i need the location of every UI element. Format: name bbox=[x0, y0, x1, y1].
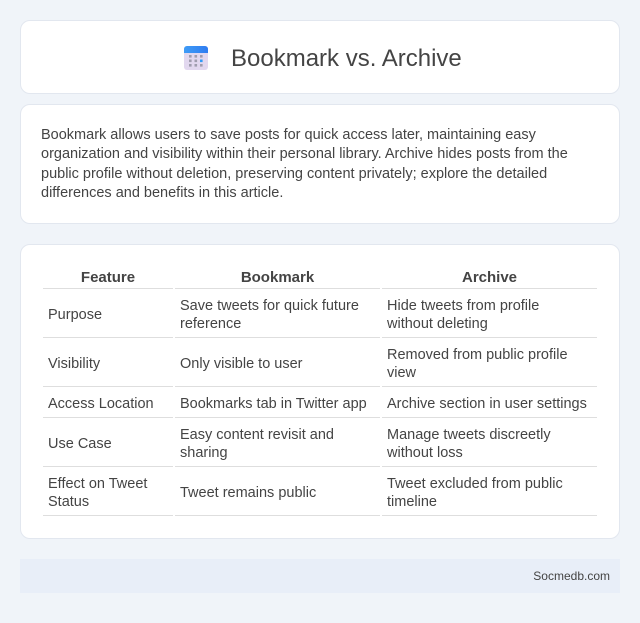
row: Purpose: without deleting bbox=[387, 316, 488, 332]
row: Access Location: Access Location bbox=[48, 396, 154, 412]
row: Access Location: Bookmarks tab in Twitter app bbox=[180, 396, 367, 412]
row: Use Case: sharing bbox=[180, 445, 228, 461]
header: Feature: Feature bbox=[81, 269, 135, 286]
row: Purpose: reference bbox=[180, 316, 241, 332]
row: Use Case: without loss bbox=[387, 445, 463, 461]
row: Effect on Tweet Status bbox=[43, 476, 597, 516]
icon: calendar bbox=[184, 46, 208, 70]
comparison table bbox=[43, 269, 597, 516]
panel: description bbox=[20, 104, 620, 224]
description text bbox=[41, 127, 568, 201]
header: Archive: Archive bbox=[462, 269, 517, 286]
row: Purpose bbox=[43, 298, 597, 338]
row: Use Case bbox=[43, 427, 597, 467]
row: Visibility: Visibility bbox=[48, 356, 100, 372]
row: Visibility: view bbox=[387, 365, 416, 381]
row: Visibility bbox=[43, 347, 597, 387]
row: Effect on Tweet Status: Tweet remains public bbox=[180, 485, 316, 501]
description text: public profile without deletion, preserving content privately; explore the detailed bbox=[41, 166, 547, 182]
header: Bookmark: Bookmark bbox=[241, 269, 314, 286]
row: Use Case: Easy content revisit and bbox=[180, 427, 334, 443]
description text: differences and benefits in this article. bbox=[41, 185, 283, 201]
row: Effect on Tweet Status: Effect on Tweet bbox=[48, 476, 147, 492]
row: Use Case: Use Case bbox=[48, 436, 112, 452]
title: Bookmark vs. Archive bbox=[231, 45, 462, 72]
footer bar bbox=[20, 559, 620, 593]
row: Effect on Tweet Status: Tweet excluded from public bbox=[387, 476, 563, 492]
row: Purpose: Save tweets for quick future bbox=[180, 298, 359, 314]
panel: title card bbox=[20, 20, 620, 94]
row: Effect on Tweet Status: Status bbox=[48, 494, 89, 510]
row: Purpose: Hide tweets from profile bbox=[387, 298, 539, 314]
row: Visibility: Removed from public profile bbox=[387, 347, 568, 363]
row: Use Case: Manage tweets discreetly bbox=[387, 427, 551, 443]
row: Access Location: Archive section in user settings bbox=[387, 396, 587, 412]
description text: Bookmark allows users to save posts for quick access later, maintaining easy bbox=[41, 127, 536, 143]
description text: organization and visibility within their personal library. Archive hides posts from the bbox=[41, 146, 568, 162]
panel: comparison table bbox=[20, 244, 620, 539]
footer text: Socmedb.com bbox=[533, 569, 610, 583]
row: Visibility: Only visible to user bbox=[180, 356, 302, 372]
table header row bbox=[43, 269, 597, 289]
row: Effect on Tweet Status: timeline bbox=[387, 494, 437, 510]
row: Access Location bbox=[43, 396, 597, 418]
row: Purpose: Purpose bbox=[48, 307, 102, 323]
